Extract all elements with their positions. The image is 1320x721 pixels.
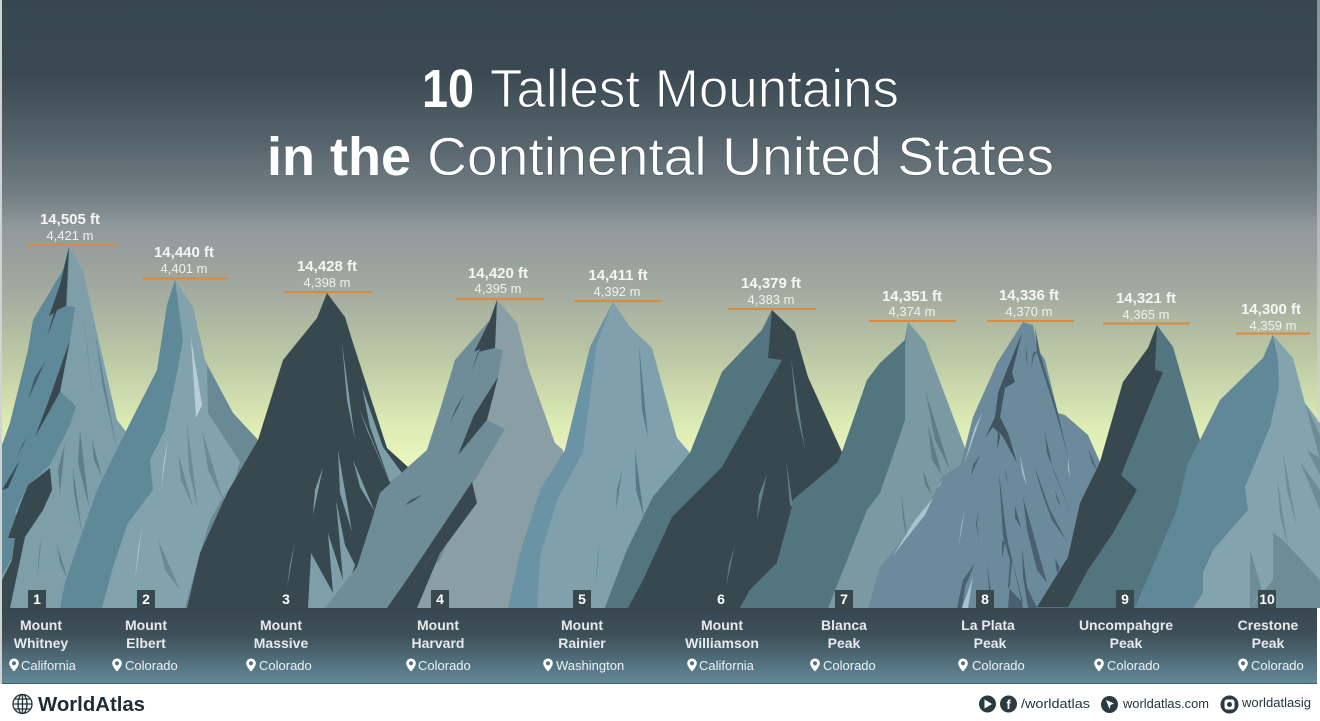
name 8: Peak bbox=[974, 635, 1007, 651]
icon: cursor bbox=[1101, 696, 1118, 713]
name 6 bbox=[685, 617, 759, 673]
height label 8: 14,336 ft bbox=[999, 287, 1059, 304]
rank badge 6 bbox=[712, 590, 730, 609]
height label 10: 14,300 ft bbox=[1241, 301, 1301, 318]
height label 4: 14,420 ft bbox=[468, 265, 528, 282]
mountain 8: La Plata Peak bbox=[868, 322, 1100, 608]
rank badge 8: 8 bbox=[981, 591, 989, 607]
rank badge 1: 1 bbox=[33, 591, 41, 607]
title: 10 bbox=[422, 59, 474, 119]
height label 5: 4,392 m bbox=[594, 284, 640, 299]
height label 9: 4,365 m bbox=[1123, 307, 1169, 322]
rank badge 6: 6 bbox=[717, 591, 725, 607]
name 7: Colorado bbox=[823, 658, 876, 673]
name 2: Colorado bbox=[125, 658, 178, 673]
title bbox=[267, 59, 1054, 187]
name 6: California bbox=[699, 658, 755, 673]
name 3: Colorado bbox=[259, 658, 312, 673]
height label 7: 14,351 ft bbox=[882, 288, 942, 305]
name 1: Whitney bbox=[14, 635, 68, 651]
icon: facebook bbox=[1000, 696, 1017, 712]
rank badge 10: 10 bbox=[1259, 591, 1275, 607]
name 6: Williamson bbox=[685, 635, 759, 651]
rank badge 7: 7 bbox=[840, 591, 848, 607]
height label 7: 4,374 m bbox=[889, 304, 935, 319]
height label 2 bbox=[142, 244, 229, 280]
height label 9 bbox=[1103, 290, 1190, 324]
height label 6: 4,383 m bbox=[748, 292, 794, 307]
rank badge 1 bbox=[28, 590, 46, 609]
name 1: Mount bbox=[20, 617, 62, 633]
name 8 bbox=[958, 617, 1025, 673]
name 10: Colorado bbox=[1251, 658, 1304, 673]
name 10 bbox=[1238, 617, 1304, 673]
name 5 bbox=[543, 617, 624, 673]
title: Tallest Mountains bbox=[490, 59, 899, 119]
sky background bbox=[0, 0, 1320, 460]
name 2 bbox=[112, 617, 178, 673]
rank badge 4 bbox=[431, 590, 449, 609]
mountain 10: Crestone Peak bbox=[1135, 335, 1320, 608]
height label 10: 4,359 m bbox=[1250, 318, 1296, 333]
mountain 3: Mount Massive bbox=[187, 293, 420, 608]
name 8: La Plata bbox=[961, 617, 1015, 633]
website: worldatlas.com bbox=[1122, 696, 1209, 711]
instagram handle: worldatlasig bbox=[1241, 695, 1311, 710]
height label 9: 14,321 ft bbox=[1116, 290, 1176, 307]
name 9: Colorado bbox=[1107, 658, 1160, 673]
icon: instagram bbox=[1220, 696, 1238, 714]
mountain 4: Mount Harvard bbox=[325, 300, 563, 608]
name 7 bbox=[810, 617, 876, 673]
height label 10 bbox=[1236, 301, 1310, 334]
mountain 2: Mount Elbert bbox=[60, 280, 262, 608]
social handle: /worldatlas bbox=[1021, 696, 1091, 711]
title: Continental United States bbox=[427, 127, 1054, 187]
name 3: Massive bbox=[254, 635, 308, 651]
logo wordmark: WorldAtlas bbox=[38, 694, 145, 716]
height label 4: 4,395 m bbox=[475, 281, 521, 296]
rank badge 3: 3 bbox=[282, 591, 290, 607]
mountain 7: Blanca Peak bbox=[740, 322, 990, 608]
rank badge 7 bbox=[835, 590, 853, 609]
height label 8: 4,370 m bbox=[1006, 304, 1052, 319]
mountain 6: Mount Williamson bbox=[605, 310, 842, 608]
height label 5: 14,411 ft bbox=[588, 267, 648, 284]
mountain 1: Mount Whitney bbox=[2, 247, 150, 608]
height label 6 bbox=[728, 275, 816, 310]
height label 6: 14,379 ft bbox=[741, 275, 801, 292]
height label 1: 14,505 ft bbox=[40, 211, 100, 228]
icon: globe bbox=[13, 694, 32, 714]
name 4: Harvard bbox=[412, 635, 464, 651]
rank badge 3 bbox=[277, 590, 295, 609]
name 1: California bbox=[21, 658, 77, 673]
name 9: Uncompahgre bbox=[1079, 617, 1173, 633]
name 9: Peak bbox=[1110, 635, 1143, 651]
name 5: Washington bbox=[556, 658, 624, 673]
mountain 5: Mount Rainier bbox=[508, 302, 700, 608]
name 3 bbox=[246, 617, 312, 673]
icon: play bbox=[979, 696, 996, 712]
rank badge 5 bbox=[573, 590, 591, 609]
name 6: Mount bbox=[701, 617, 743, 633]
name 8: Colorado bbox=[972, 658, 1025, 673]
rank badge 2 bbox=[137, 590, 155, 609]
side margins bbox=[0, 0, 2, 684]
rank badge 5: 5 bbox=[578, 591, 586, 607]
rank badge 9: 9 bbox=[1121, 591, 1129, 607]
name 9 bbox=[1079, 617, 1173, 673]
height label 3 bbox=[284, 258, 372, 293]
height label 5 bbox=[574, 267, 661, 302]
name 2: Mount bbox=[125, 617, 167, 633]
footer background bbox=[0, 684, 1320, 721]
rank badge 2: 2 bbox=[142, 591, 150, 607]
name 7: Peak bbox=[828, 635, 861, 651]
rank badge 9 bbox=[1116, 590, 1134, 609]
height label 1: 4,421 m bbox=[47, 228, 93, 243]
name 4 bbox=[406, 617, 471, 673]
name 5: Mount bbox=[561, 617, 603, 633]
height label 7 bbox=[869, 288, 956, 322]
name 2: Elbert bbox=[126, 635, 166, 651]
height label 4 bbox=[456, 265, 544, 300]
name 3: Mount bbox=[260, 617, 302, 633]
mountain 9: Uncompahgre Peak bbox=[1037, 325, 1220, 608]
icon: facebook: f bbox=[1006, 697, 1011, 712]
height label 2: 4,401 m bbox=[161, 261, 207, 276]
name 5: Rainier bbox=[558, 635, 606, 651]
name 10: Peak bbox=[1252, 635, 1285, 651]
rank badge 4: 4 bbox=[436, 591, 444, 607]
name 7: Blanca bbox=[821, 617, 867, 633]
height label 3: 4,398 m bbox=[304, 275, 350, 290]
height label 2: 14,440 ft bbox=[154, 244, 214, 261]
name 4: Colorado bbox=[418, 658, 471, 673]
title: in the bbox=[267, 127, 411, 187]
name 4: Mount bbox=[417, 617, 459, 633]
height label 3: 14,428 ft bbox=[297, 258, 357, 275]
height label 1 bbox=[28, 211, 115, 246]
name 1 bbox=[9, 617, 77, 673]
height label 8 bbox=[987, 287, 1074, 322]
rank badge 8 bbox=[976, 590, 994, 609]
name 10: Crestone bbox=[1238, 617, 1299, 633]
label band bbox=[2, 608, 1317, 683]
